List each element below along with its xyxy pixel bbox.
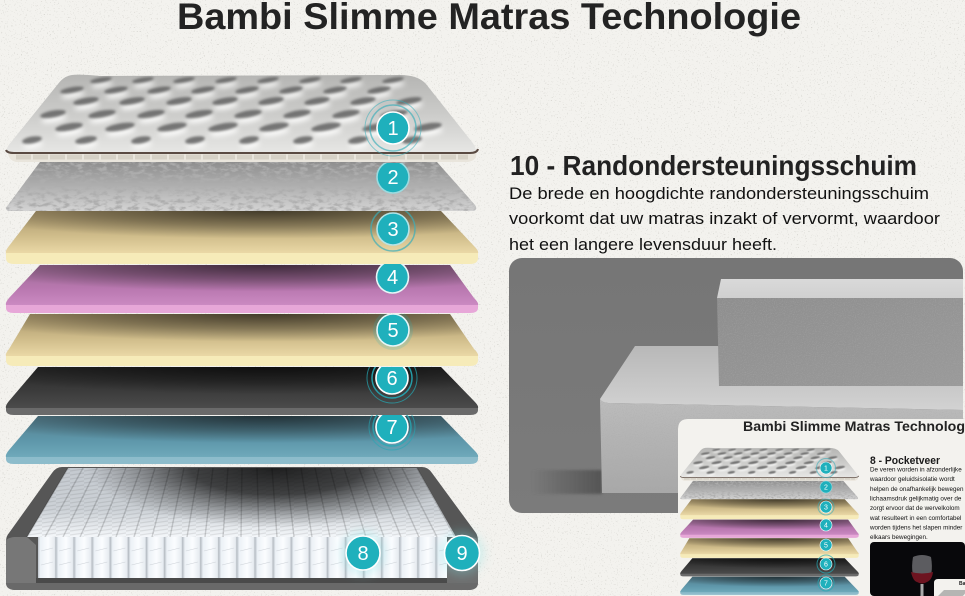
layer 4: pink foam	[6, 265, 478, 313]
foam edge frame	[6, 467, 478, 590]
badge 5: 5	[387, 320, 399, 342]
nested black wine glass photo	[870, 542, 965, 596]
nested heading: 8 - Pocketveer	[870, 455, 941, 467]
description text	[509, 185, 941, 254]
nested badges: 2	[824, 484, 828, 492]
badge 4	[376, 261, 408, 293]
description text: De brede en hoogdichte randondersteuningsschuim	[509, 185, 929, 203]
nested body text: waardoor geluidsisolatie wordt	[869, 476, 955, 483]
badge 8: 8	[357, 543, 369, 565]
badge 1 with rings	[365, 100, 421, 156]
badge 9: 9	[456, 543, 468, 565]
nested body text: worden tijdens het slapen minder	[869, 524, 962, 532]
badge 9	[440, 531, 484, 575]
nested badges: 4	[824, 522, 828, 530]
floor shadow	[545, 469, 602, 495]
nested badges: 7	[824, 580, 828, 588]
layer 1: quilted top mattress	[6, 75, 478, 162]
nested body text: elkaars bewegingen.	[870, 534, 928, 541]
badge 2: 2	[387, 167, 399, 189]
layer 2: grey wool	[6, 162, 476, 211]
nested badges: 1	[824, 466, 828, 472]
nested body text	[869, 466, 964, 541]
left foam corner	[6, 537, 36, 583]
layer 8 and 9: pocket springs in foam edge frame	[6, 467, 478, 590]
nested body text: lichaamsdruk gelijkmatig over de	[870, 496, 962, 502]
nested body text: zorgt ervoor dat de wervelkolom	[870, 505, 960, 512]
badge 8	[341, 531, 385, 575]
nested body text: wat resulteert in een comfortabel	[869, 515, 961, 522]
right foam corner	[447, 537, 478, 583]
nested badges: 5	[824, 542, 828, 550]
badge 6 with rings	[366, 367, 418, 404]
layer 5: yellow foam	[6, 314, 478, 366]
bottom foam rail	[36, 578, 447, 584]
section heading: 10 - Randondersteuningsschuim	[510, 150, 917, 181]
nested badges: 6	[824, 562, 828, 568]
description text: voorkomt dat uw matras inzakt of vervormt, waardoor	[509, 210, 941, 228]
badge 3 with ring	[371, 207, 415, 251]
pocket spring field	[27, 468, 456, 578]
nested title: Bambi Slimme Matras Technolog	[743, 419, 965, 434]
layer 7: blue foam	[6, 416, 478, 464]
badge 5	[373, 310, 413, 350]
badge 2	[377, 161, 409, 193]
badge 1 with rings: 1	[387, 118, 399, 140]
layer 6: black foam	[6, 367, 478, 415]
badge 7 with rings: 7	[386, 417, 398, 439]
nested badges: 3	[824, 504, 828, 512]
upper foam block	[717, 279, 963, 386]
description text: het een langere levensduur heeft.	[509, 236, 777, 254]
nested badges	[816, 458, 836, 591]
lower foam block	[600, 346, 963, 493]
exploded mattress layers 1 to 7	[6, 75, 478, 464]
photo: foam edge blocks	[509, 258, 963, 513]
layer 3: yellow foam	[6, 211, 478, 264]
nested page screenshot	[678, 419, 965, 596]
badge 7 with rings	[368, 415, 416, 450]
badge 3 with ring: 3	[387, 219, 399, 241]
wine glass	[911, 555, 933, 596]
nested body text: helpen de onafhankelijk bewegen	[870, 486, 964, 493]
nested body text: De veren worden in afzonderlijke	[870, 466, 962, 474]
badge 6 with rings: 6	[386, 368, 398, 390]
badge 4: 4	[387, 267, 398, 289]
nested mattress stack	[680, 448, 859, 595]
